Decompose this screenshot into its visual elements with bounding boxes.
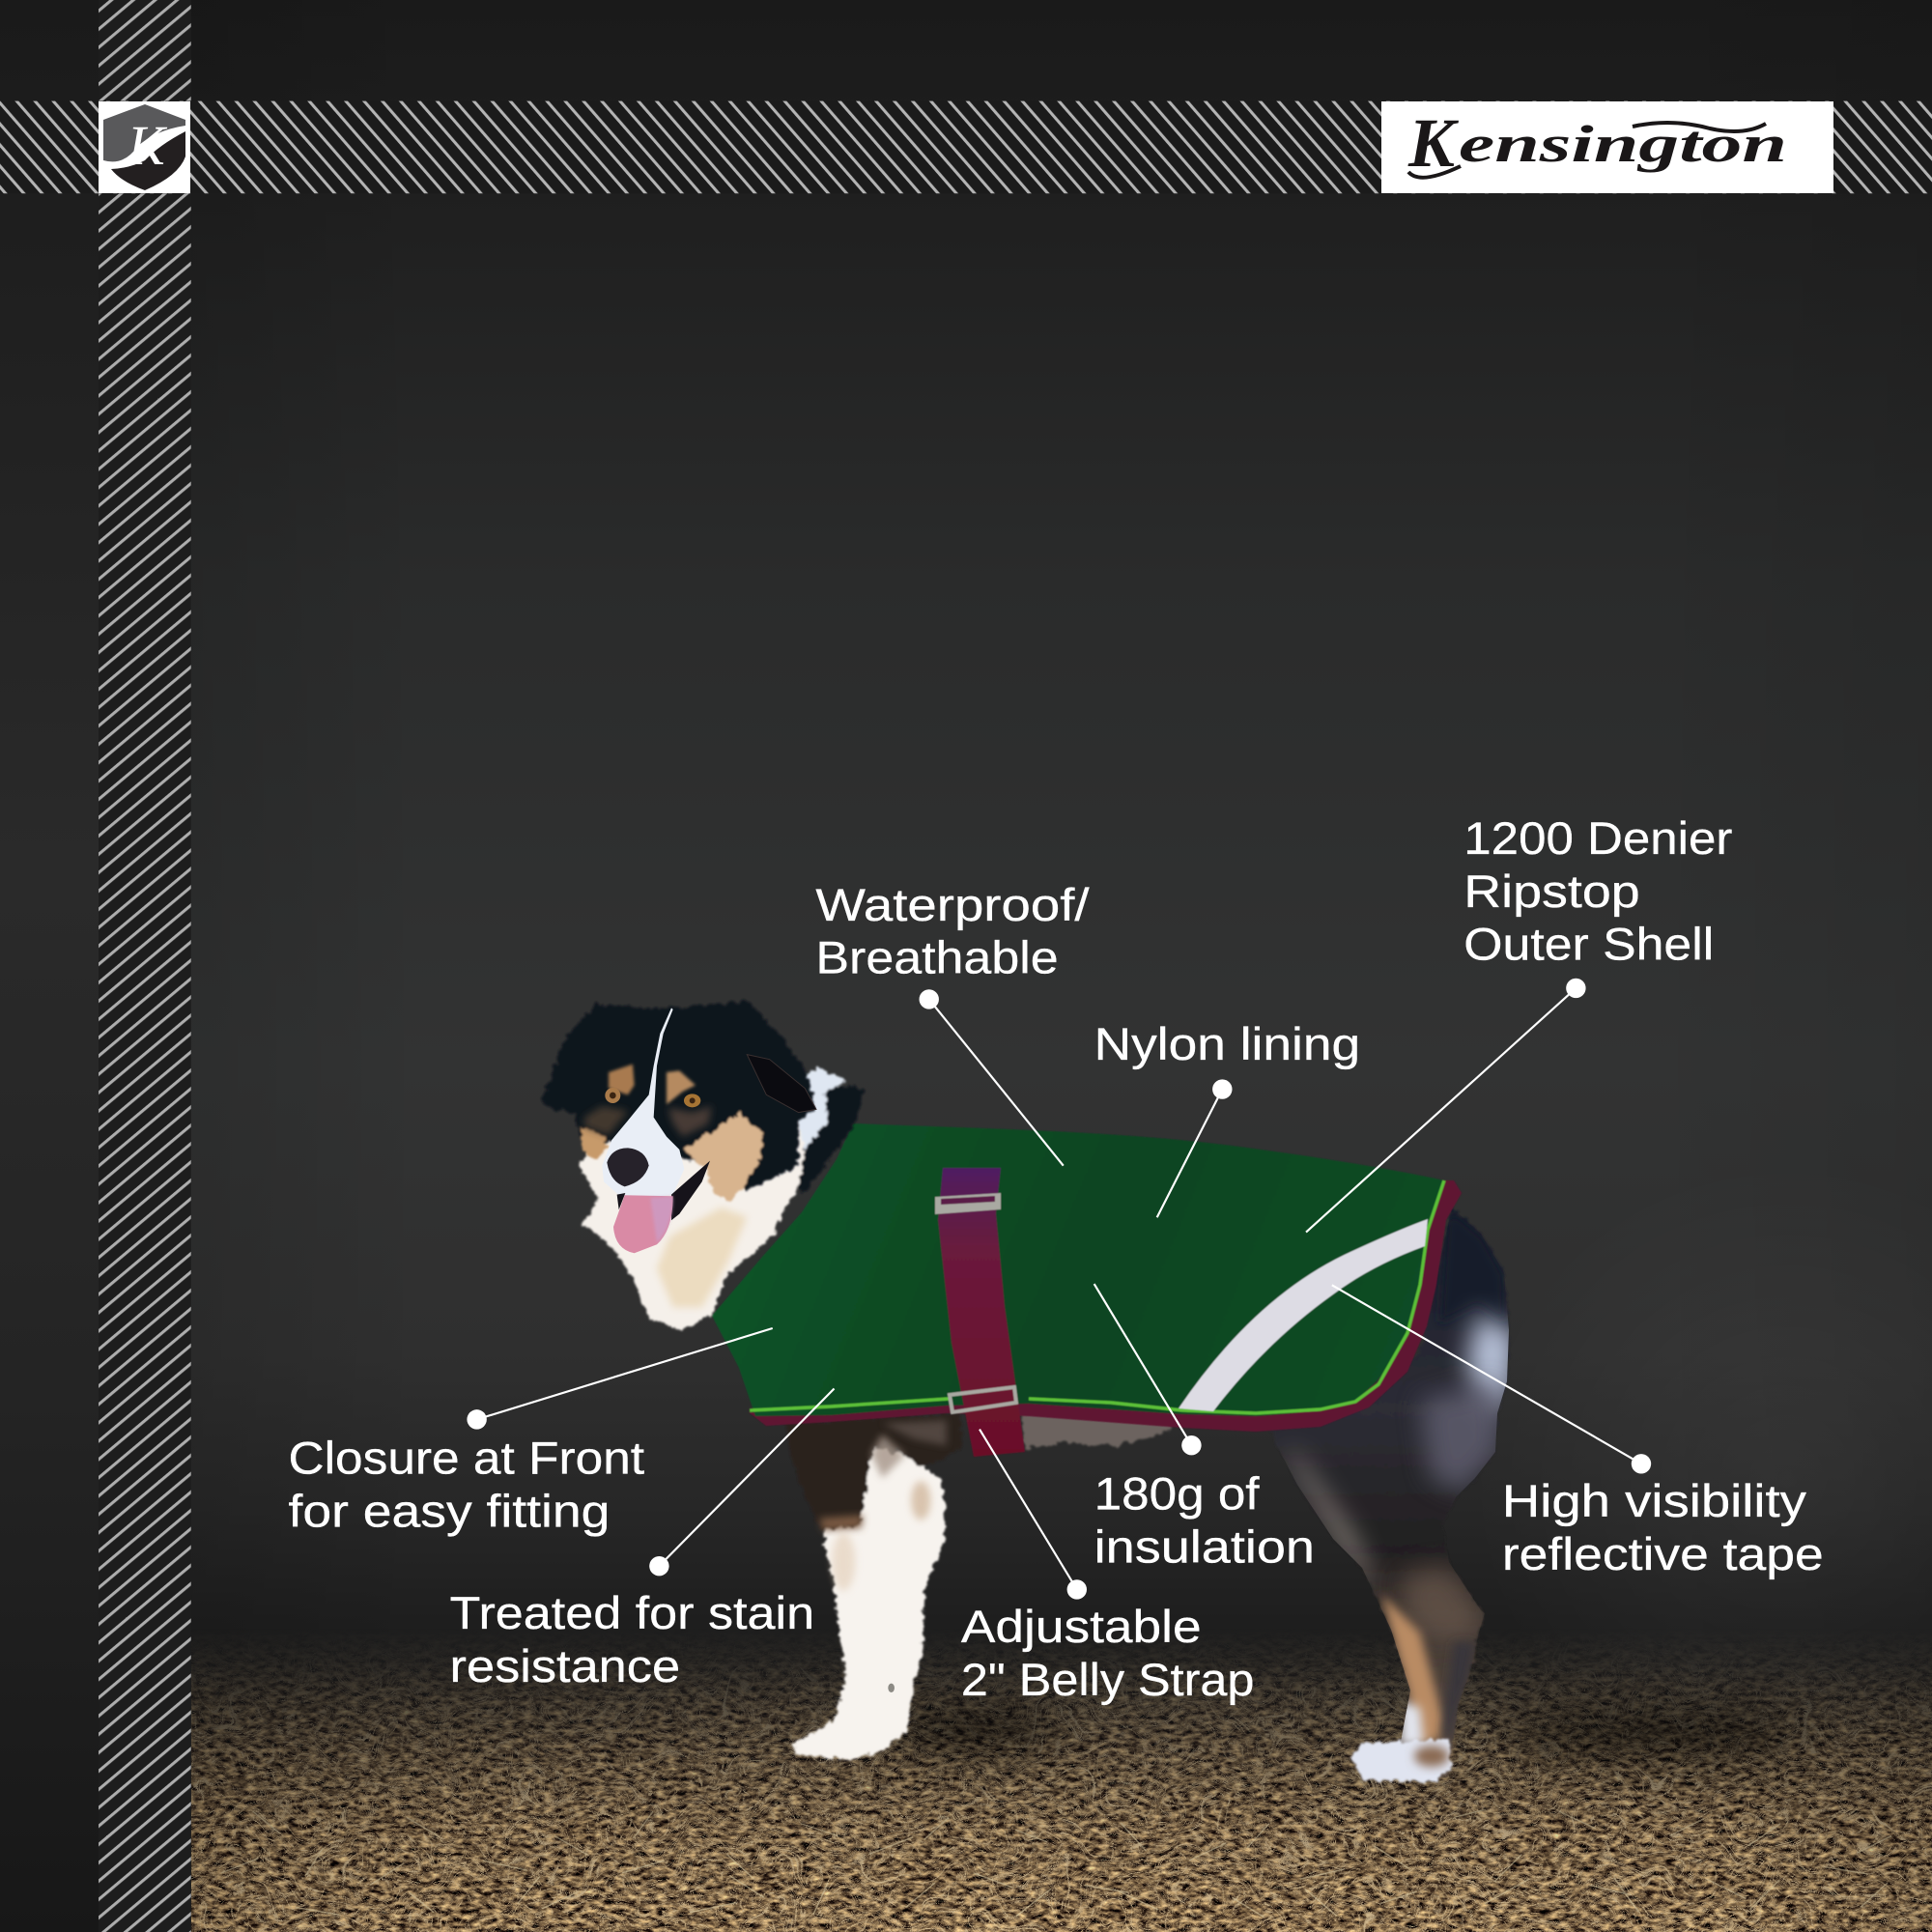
logo: Kensington wordmark <box>1381 101 1833 193</box>
logo: Kensington wordmark: K <box>1407 104 1460 182</box>
chest fur and neck <box>578 1067 863 1330</box>
coat body <box>712 1123 1444 1416</box>
icon: Kensington K shield badge: K <box>127 114 168 177</box>
belly fur <box>1021 1412 1174 1449</box>
callout: Treated for stain resistance <box>450 1389 835 1692</box>
front leg <box>785 1413 963 1760</box>
callout: 180g of insulation <box>1094 1284 1315 1573</box>
callout: Adjustable belly strap <box>961 1430 1254 1706</box>
logo: Kensington wordmark: ensington <box>1459 115 1787 173</box>
callout: Adjustable belly strap: 2" Belly Strap <box>961 1655 1254 1706</box>
callout: Nylon lining: Nylon lining <box>1094 1019 1360 1070</box>
callout: 180g of insulation: 180g of <box>1094 1469 1261 1520</box>
callout: 1200 Denier Ripstop Outer Shell: 1200 Denier <box>1463 813 1732 865</box>
belly strap <box>938 1168 1025 1457</box>
icon: Kensington K shield badge <box>99 101 190 193</box>
mouth <box>671 1161 710 1220</box>
top strap buckle <box>935 1193 1001 1214</box>
callout: Closure at Front: for easy fitting <box>288 1486 610 1537</box>
coat green piping <box>750 1180 1444 1413</box>
nose <box>607 1148 649 1186</box>
head fur mask <box>541 1002 816 1201</box>
callout: Waterproof/Breathable <box>815 880 1091 1166</box>
callout: High visibility reflective tape <box>1332 1285 1824 1580</box>
left side column <box>0 0 191 1932</box>
callout: Closure at Front: Closure at Front <box>288 1434 644 1485</box>
tongue <box>613 1195 673 1253</box>
callout: 1200 Denier Ripstop Outer Shell: Ripstop <box>1463 867 1640 918</box>
callout: High visibility reflective tape: High visibility <box>1502 1476 1806 1527</box>
callout: Adjustable belly strap: Adjustable <box>961 1602 1202 1653</box>
reflective tape <box>1179 1219 1428 1411</box>
bottom strap buckle <box>950 1387 1016 1412</box>
callout: 1200 Denier Ripstop Outer Shell <box>1306 813 1732 1233</box>
horizontal striped band <box>0 101 1932 193</box>
callout: High visibility reflective tape: reflective tape <box>1502 1529 1824 1580</box>
callout: Waterproof/Breathable: Waterproof/ <box>815 880 1091 931</box>
dog: Australian shepherd wearing coat <box>541 1002 1517 1782</box>
vertical striped band <box>99 0 191 1932</box>
coat maroon trim <box>749 1180 1462 1432</box>
eyes <box>605 1088 700 1107</box>
callout: 180g of insulation: insulation <box>1094 1521 1315 1573</box>
shadows under the dog's paws <box>887 1710 1799 1759</box>
dog head and chest <box>541 1002 863 1330</box>
callout: Nylon lining <box>1094 1019 1360 1217</box>
hind leg <box>1268 1208 1517 1782</box>
ear <box>747 1055 816 1113</box>
callout: Waterproof/Breathable: Breathable <box>815 933 1059 984</box>
callout: Closure at Front <box>288 1328 773 1537</box>
callout: Treated for stain resistance: resistance <box>450 1641 680 1692</box>
dog coat <box>712 1123 1462 1457</box>
floor: straw and dirt ground <box>191 1642 1932 1932</box>
callout: Treated for stain resistance: Treated for stain <box>450 1588 814 1639</box>
callout: 1200 Denier Ripstop Outer Shell: Outer Shell <box>1463 920 1714 971</box>
